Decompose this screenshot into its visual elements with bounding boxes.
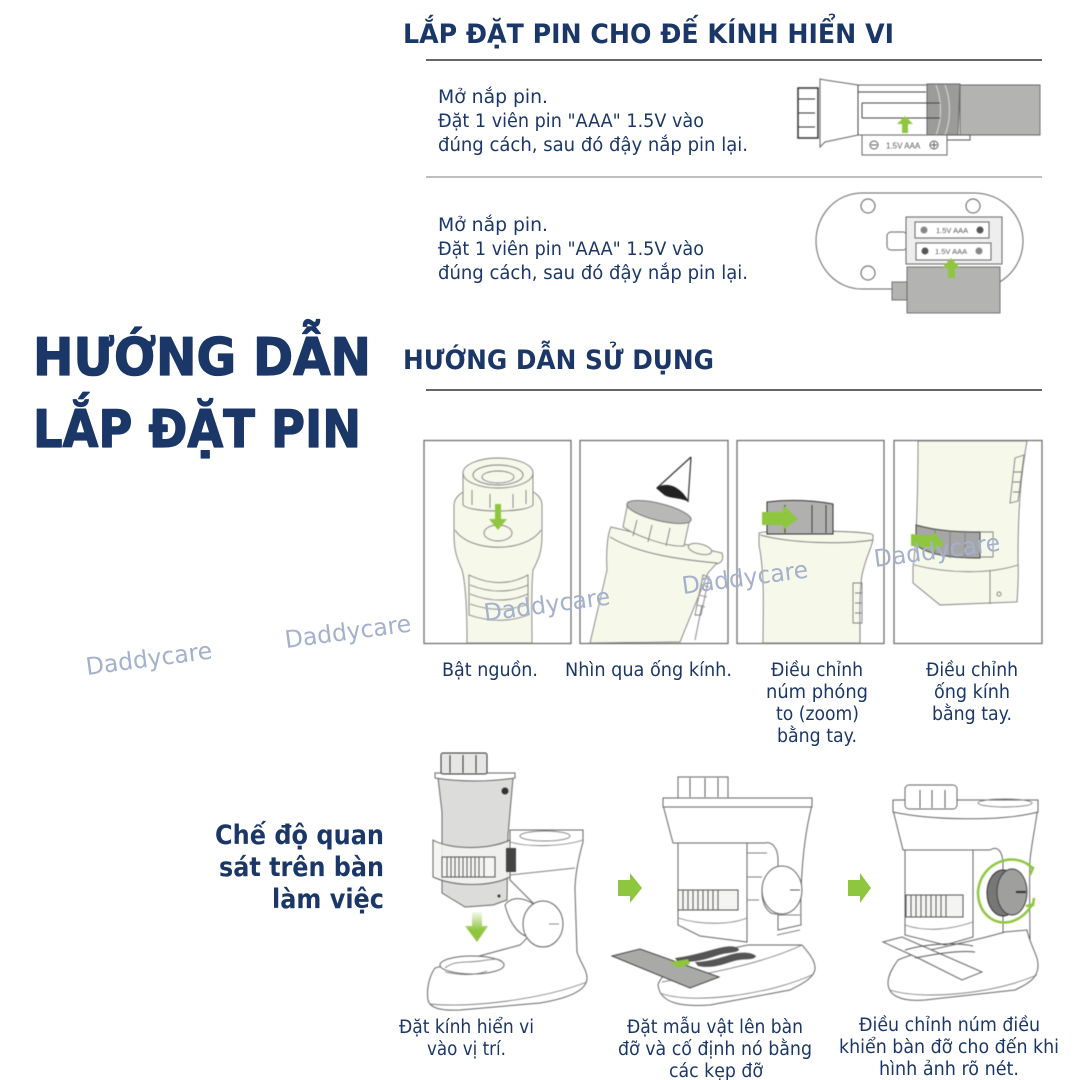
caption: adjust knob: hình ảnh rõ nét. [879,1059,1019,1080]
panel: zoom knob [737,440,884,644]
caption: lens ring: Điều chỉnh [926,660,1018,681]
caption: insert scope [399,1017,534,1060]
caption: look through lens: Nhìn qua ống kính. [565,660,732,681]
watermarks: Daddycare [872,529,1002,573]
caption: lens ring: ống kính [934,682,1010,703]
heading: usage guide: HƯỚNG DẪN SỬ DỤNG [403,340,714,376]
panel: power on [424,440,571,644]
subheading: desktop observation mode: sát trên bàn [219,852,384,883]
watermarks: Daddycare [680,556,810,600]
arrow: insert down [465,912,488,942]
icon: stand base battery compartment: 1.5V AAA [935,247,967,256]
text block: battery step 2 [438,215,748,284]
arrow: press down [489,504,507,530]
text block: battery step 1: Đặt 1 viên pin "AAA" 1.5V vào [438,111,704,132]
caption: adjust knob: Điều chỉnh núm điều [859,1015,1040,1036]
watermarks [84,529,1002,681]
caption: lens ring: bằng tay. [932,704,1012,725]
watermarks: Daddycare [482,583,612,627]
illustration: place specimen on stage [612,777,815,1005]
dial rotation arrows [978,860,1034,923]
caption: lens ring [926,660,1018,725]
arrow: step one to two [618,873,642,903]
icon: microscope handle battery compartment [798,79,1040,155]
arrow: step two to three [848,873,871,903]
text block: battery step 2: đúng cách, sau đó đậy nắp pin lại. [438,263,748,284]
text block: battery step 2: Đặt 1 viên pin "AAA" 1.5V vào [438,239,704,260]
text block: battery step 2: Mở nắp pin. [438,215,548,236]
illustration: adjust stage knob [883,785,1038,1000]
icon: stand base battery compartment [816,193,1023,313]
specimen slide [612,949,719,988]
caption: insert scope: Đặt kính hiển vi [399,1017,534,1038]
panel: look through lens [580,440,728,644]
subheading: desktop observation mode [215,820,384,915]
caption: place specimen: Đặt mẫu vật lên bàn [627,1017,803,1038]
caption: zoom knob: to (zoom) [776,704,859,725]
heading: battery installation: LẮP ĐẶT PIN CHO ĐẾ KÍNH HIỂN VI [403,13,894,50]
arrow: turn right [762,505,798,530]
text block: battery step 1: Mở nắp pin. [438,87,548,108]
caption: zoom knob: Điều chỉnh [771,660,863,681]
icon: stand base battery compartment: 1.5V AAA [936,226,968,235]
main title [33,320,371,460]
caption: adjust knob: khiển bàn đỡ cho đến khi [839,1037,1059,1058]
battery AAA: 1.5V AAA [886,142,921,150]
subheading: desktop observation mode: làm việc [272,884,384,915]
subheading: desktop observation mode: Chế độ quan [215,820,384,851]
panel: lens ring [894,440,1042,644]
arrow: rotate ring [911,531,944,553]
text block: battery step 1 [438,87,748,156]
text block: battery step 1: đúng cách, sau đó đậy nắp pin lại. [438,135,748,156]
battery AAA [862,135,947,155]
caption: place specimen [618,1017,812,1080]
caption: adjust knob [839,1015,1059,1080]
icon: eye [656,457,691,502]
caption: zoom knob [766,660,868,747]
caption: zoom knob: núm phóng [766,682,868,703]
illustration: insert scope into stand [427,753,587,1010]
watermarks: Daddycare [84,637,214,681]
caption: power on: Bật nguồn. [442,660,538,681]
watermarks: Daddycare [283,610,413,654]
caption: zoom knob: bằng tay. [777,726,857,747]
main title: HƯỚNG DẪN [33,320,371,388]
caption: place specimen: đỡ và cố định nó bằng [618,1039,812,1060]
main title: LẮP ĐẶT PIN [33,392,361,460]
caption: insert scope: vào vị trí. [427,1039,506,1060]
